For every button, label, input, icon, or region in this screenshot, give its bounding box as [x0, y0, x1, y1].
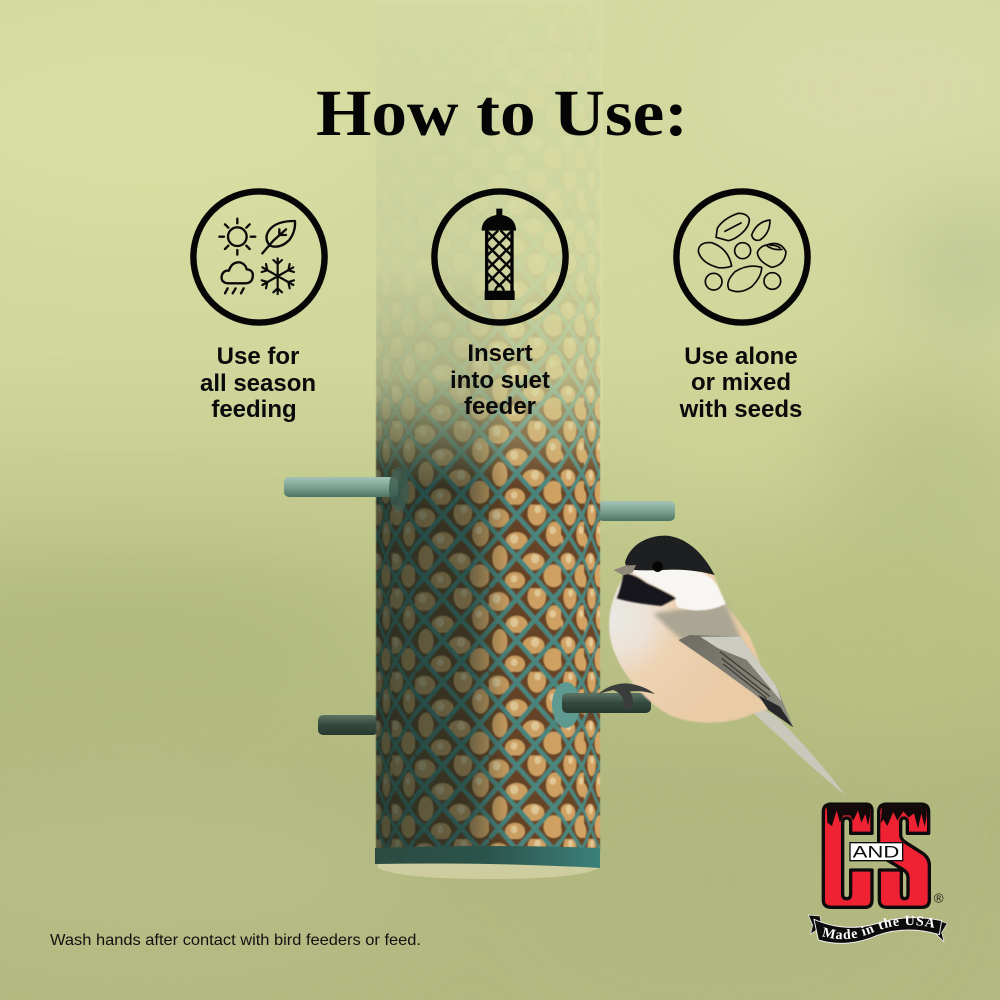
- logo: [808, 802, 948, 944]
- grey back: [653, 602, 740, 663]
- tail: [753, 703, 845, 795]
- icon: suet feeder: [434, 191, 566, 323]
- label: all season: feeding: [211, 396, 297, 423]
- footnote: Wash hands after contact with bird feeders or feed.: [50, 932, 421, 949]
- seed: large left: [698, 243, 732, 268]
- label: insert: Insert: [467, 340, 533, 367]
- white cheek: [629, 568, 726, 610]
- chickadee bird: [598, 536, 845, 795]
- label: all season: all season: [200, 370, 316, 397]
- feeder bottom band: [375, 846, 600, 868]
- title: How to Use:: [316, 77, 688, 150]
- label: seeds: with seeds: [679, 396, 802, 423]
- AND box: AND: [853, 843, 899, 862]
- seed: sunflower: [716, 213, 749, 241]
- label: insert: into suet: [450, 367, 550, 394]
- label: seeds: Use alone: [684, 343, 798, 370]
- wing: [678, 635, 793, 727]
- snowflake: [262, 258, 294, 294]
- beak: [613, 565, 636, 575]
- seed: cracked corn: [757, 243, 786, 267]
- black cap: [625, 536, 715, 575]
- label: seeds: or mixed: [691, 369, 791, 396]
- eye: [652, 561, 663, 572]
- feeder mesh with pellets: [376, 3, 600, 853]
- foot: [598, 683, 655, 709]
- registered mark: ®: [934, 890, 944, 905]
- label: insert: feeder: [464, 393, 536, 420]
- label: all season: Use for: [217, 343, 299, 370]
- upper left peg: [284, 467, 409, 511]
- C S letters: [823, 804, 929, 907]
- rain cloud: [222, 262, 253, 293]
- feeder bottom cap: [378, 862, 599, 879]
- sun: [219, 219, 255, 255]
- feeder fade to background: [375, 0, 603, 485]
- lower right peg: [552, 682, 651, 728]
- suet feeder: [284, 0, 651, 879]
- icon: seeds: [676, 191, 808, 323]
- ribbon: Made in the USA: [822, 916, 934, 940]
- icon: seasons: [193, 191, 325, 323]
- black bib: [617, 573, 676, 606]
- leaf: [262, 221, 295, 253]
- body: [609, 540, 777, 723]
- rear pegs of feeder: [318, 501, 675, 735]
